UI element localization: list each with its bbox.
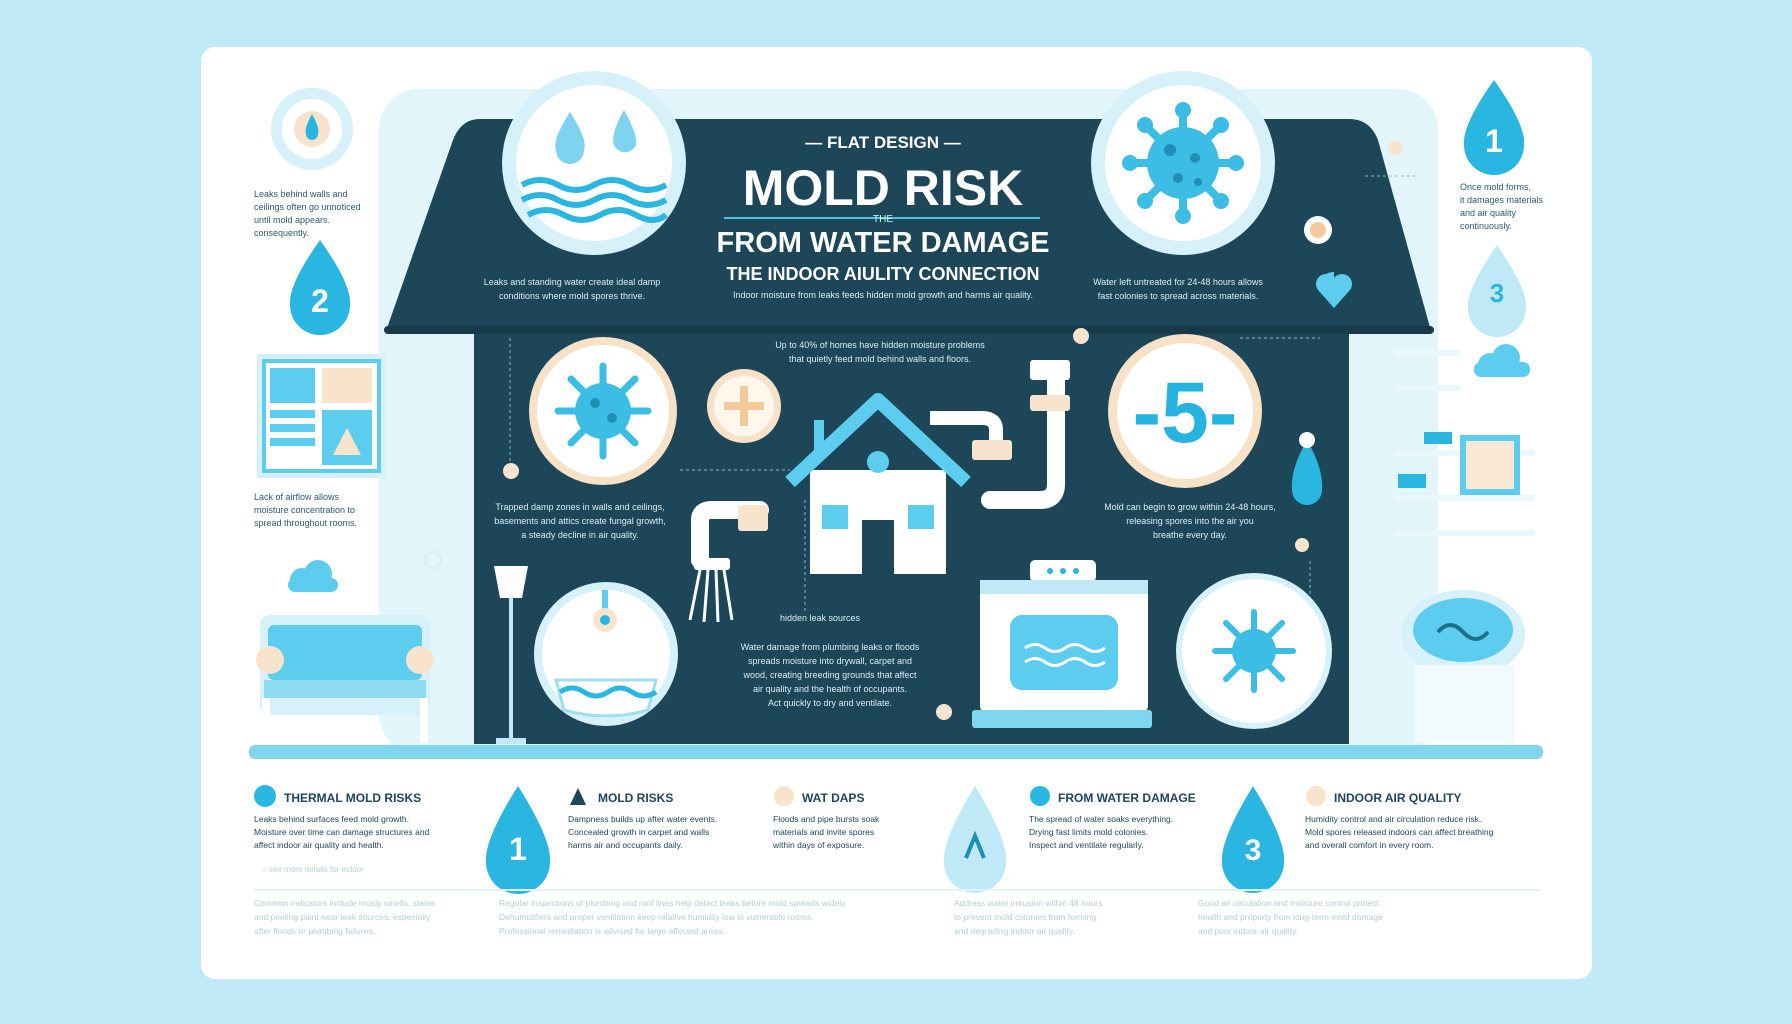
image panel (257, 354, 386, 478)
footer notes: and poor indoor air quality. (1198, 926, 1298, 936)
footer notes: Dehumidifiers and proper ventilation keep relative humidity low in vulnerable rooms. (499, 912, 814, 922)
footer notes: and peeling paint near leak sources, especially (254, 912, 431, 922)
left text 2: moisture concentration to (254, 505, 355, 515)
item 1: ○ see more details for indoor (262, 865, 364, 874)
title line 3: THE INDOOR AIULITY CONNECTION (726, 264, 1040, 284)
left text 1: consequently. (254, 228, 309, 238)
footer notes: Address water intrusion within 48 hours (954, 898, 1102, 908)
footer notes: health and property from long-term mold damage (1198, 912, 1383, 922)
roof side texts: Leaks and standing water create ideal damp (484, 277, 660, 287)
item 5: Mold spores released indoors can affect breathing (1305, 827, 1494, 837)
footer notes: Common indicators include musty smells, stains (254, 898, 435, 908)
footer notes: Professional remediation is advised for large affected areas. (499, 926, 725, 936)
right text (1460, 182, 1544, 231)
drip hanging right (1292, 432, 1322, 505)
item 2: Concealed growth in carpet and walls (568, 827, 709, 837)
item 2: harms air and occupants daily. (568, 840, 683, 850)
roof side texts: fast colonies to spread across materials. (1098, 291, 1258, 301)
item 4: The spread of water soaks everything. (1029, 814, 1173, 824)
mid text blocks: releasing spores into the air you (1126, 516, 1254, 526)
item 1: THERMAL MOLD RISKS (284, 791, 421, 805)
main title: MOLD RISK (743, 160, 1023, 216)
right text: continuously. (1460, 221, 1512, 231)
icon: number 5 circle: -5- (1132, 365, 1238, 461)
footer notes: Regular inspections of plumbing and roof lines help detect leaks before mold spreads widely. (499, 898, 847, 908)
icon: virus mid left (529, 337, 677, 485)
item 1: Moisture over time can damage structures and (254, 827, 430, 837)
footer notes (254, 898, 1383, 936)
item 3: Floods and pipe bursts soak (773, 814, 880, 824)
item 5 (1305, 786, 1494, 850)
item 3: WAT DAPS (802, 791, 864, 805)
footer notes: Good air circulation and moisture control protect (1198, 898, 1380, 908)
icon: number 5 circle (1108, 334, 1262, 488)
title line 2: FROM WATER DAMAGE (717, 227, 1049, 259)
left text 2: Lack of airflow allows (254, 492, 340, 502)
mid text blocks: that quietly feed mold behind walls and floors. (789, 354, 971, 364)
drop 2: 2 (311, 283, 329, 319)
mid text blocks: Act quickly to dry and ventilate. (768, 698, 892, 708)
icon: water circle (502, 71, 686, 255)
item 4 (1029, 786, 1196, 850)
bottom items row (254, 785, 1494, 894)
drop 3 (1468, 245, 1526, 337)
left text 1: Leaks behind walls and (254, 189, 348, 199)
drop big 1 (486, 786, 550, 894)
drop 3: 3 (1490, 278, 1504, 308)
item 4: FROM WATER DAMAGE (1058, 791, 1196, 805)
oven (972, 560, 1152, 728)
footer notes: and degrading indoor air quality. (954, 926, 1075, 936)
mid text blocks: Water damage from plumbing leaks or floods (741, 642, 920, 652)
title block (717, 133, 1049, 300)
inner light panel (379, 89, 1438, 754)
small decorative dots (503, 141, 1402, 720)
item 4: Drying fast limits mold colonies. (1029, 827, 1148, 837)
mid text blocks: spreads moisture into drywall, carpet and (748, 656, 912, 666)
shelves (1395, 350, 1535, 536)
item 3: within days of exposure. (772, 840, 864, 850)
item 2 (568, 788, 717, 850)
drop 2 (290, 240, 350, 335)
cloud right (1474, 344, 1530, 377)
left text 1: until mold appears. (254, 215, 330, 225)
virus bottom right (1176, 573, 1332, 729)
footer notes: after floods or plumbing failures. (254, 926, 375, 936)
roof side texts (484, 277, 1263, 301)
roof side texts: Water left untreated for 24-48 hours allows (1093, 277, 1263, 287)
icon: plus circle (707, 369, 781, 443)
mid text blocks (494, 340, 1276, 708)
item 2: MOLD RISKS (598, 791, 673, 805)
left text 1: ceilings often go unnoticed (254, 202, 361, 212)
mid text blocks: Up to 40% of homes have hidden moisture problems (775, 340, 985, 350)
item 5: INDOOR AIR QUALITY (1334, 791, 1462, 805)
item 1: Leaks behind surfaces feed mold growth. (254, 814, 409, 824)
sofa (256, 615, 434, 743)
drop big 1: 1 (509, 831, 527, 867)
cloud (288, 560, 338, 592)
white card (201, 47, 1592, 979)
drop big outline (944, 786, 1006, 893)
bathtub circle (534, 582, 678, 726)
item 3 (772, 786, 880, 850)
left column (254, 88, 528, 744)
footer notes: to prevent mold colonies from forming (954, 912, 1096, 922)
house with pipes (690, 360, 1070, 622)
drop big 3: 3 (1245, 834, 1261, 867)
right text: it damages materials (1460, 195, 1544, 205)
drop big 3 (1222, 786, 1284, 893)
roof side texts: conditions where mold spores thrive. (499, 291, 645, 301)
right column (1395, 80, 1544, 743)
mid text blocks: Mold can begin to grow within 24-48 hours, (1104, 502, 1276, 512)
lamp (494, 566, 528, 744)
mid text blocks: hidden leak sources (780, 613, 861, 623)
subtitle: flat design: — FLAT DESIGN — (805, 133, 961, 152)
mid text blocks: breathe every day. (1153, 530, 1227, 540)
item 5: Humidity control and air circulation reduce risk. (1305, 814, 1481, 824)
icon: clock (271, 88, 353, 170)
item 1: affect indoor air quality and health. (254, 840, 384, 850)
left text 2 (254, 492, 357, 528)
title caption: Indoor moisture from leaks feeds hidden mold growth and harms air quality. (733, 290, 1033, 300)
title block: THE (873, 214, 893, 225)
mid text blocks: Trapped damp zones in walls and ceilings, (495, 502, 665, 512)
floor line (249, 745, 1543, 759)
icon: heart (1324, 272, 1344, 297)
item 2: Dampness builds up after water events. (568, 814, 717, 824)
item 1 (254, 785, 430, 874)
item 5: and overall comfort in every room. (1305, 840, 1434, 850)
left text 1 (254, 189, 361, 238)
house body (474, 334, 1349, 744)
mid text blocks: wood, creating breeding grounds that affect (743, 670, 917, 680)
right text: Once mold forms, (1460, 182, 1531, 192)
icon: virus top right (1091, 71, 1275, 255)
right text: and air quality (1460, 208, 1517, 218)
drop 1: 1 (1485, 123, 1503, 159)
tub oval (1401, 590, 1525, 743)
mid text blocks: air quality and the health of occupants. (753, 684, 907, 694)
drop 1 (1464, 80, 1524, 175)
item 4: Inspect and ventilate regularly. (1029, 840, 1144, 850)
left text 2: spread throughout rooms. (254, 518, 357, 528)
dashed connectors (510, 176, 1415, 612)
mid text blocks: a steady decline in air quality. (521, 530, 639, 540)
icon: sun (1304, 216, 1332, 244)
house roof (384, 119, 1434, 334)
item 3: materials and invite spores (773, 827, 874, 837)
mid text blocks: basements and attics create fungal growth, (494, 516, 666, 526)
